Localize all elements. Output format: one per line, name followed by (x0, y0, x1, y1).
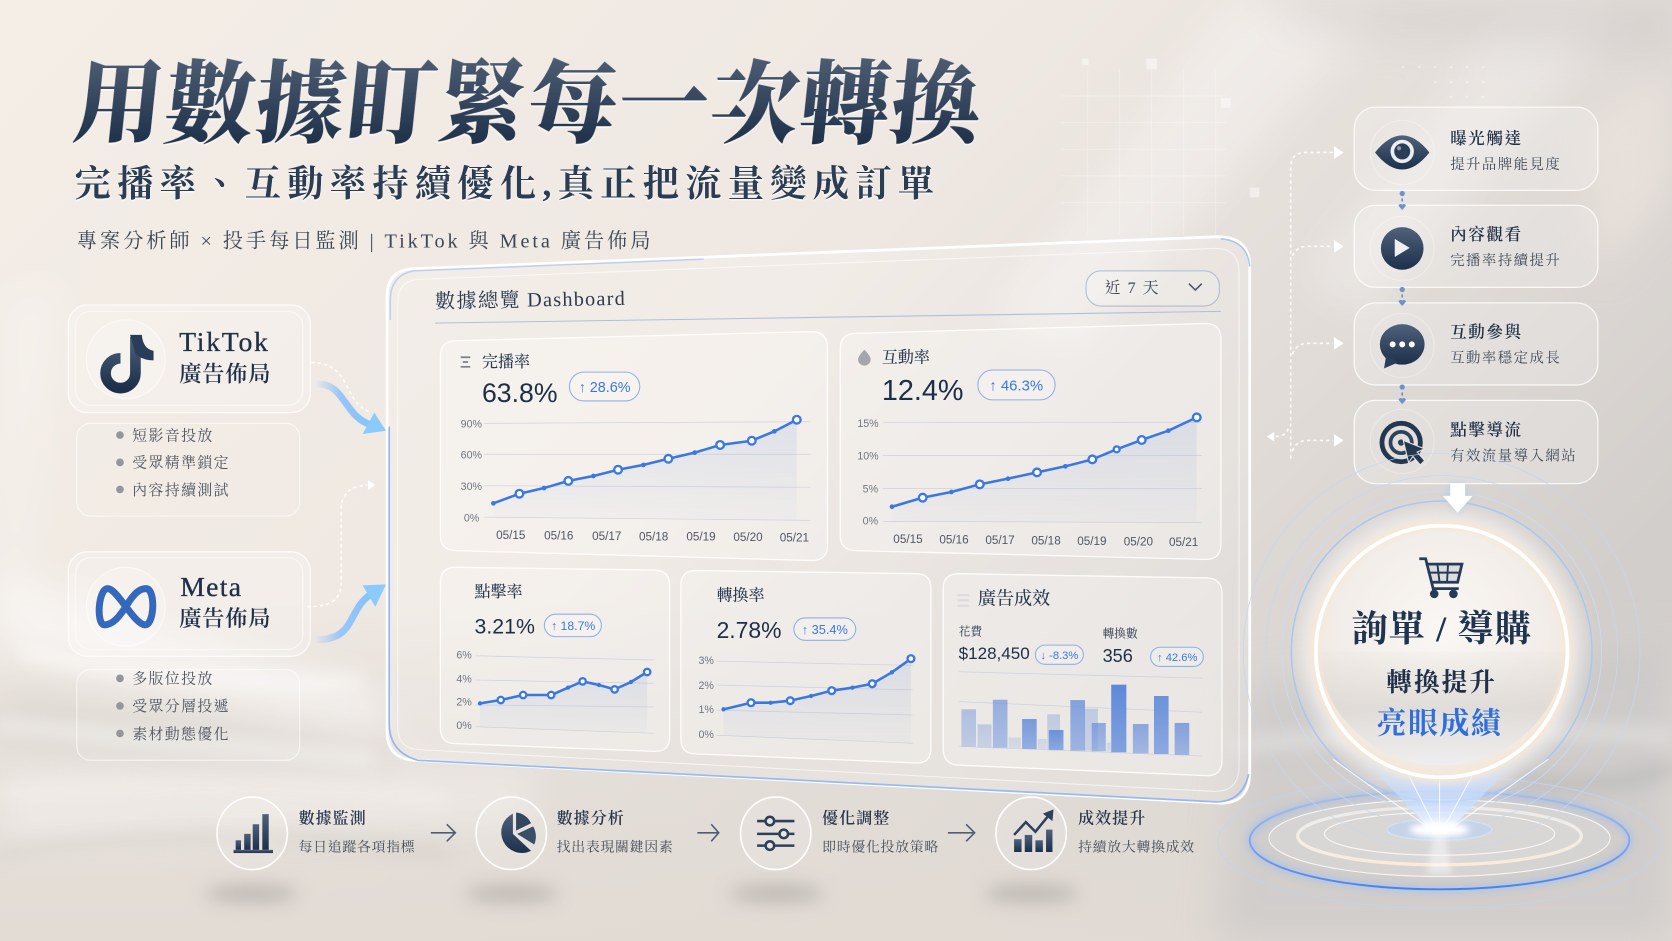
panel: engagement rate: 互動率 (882, 349, 930, 367)
icon: Meta infinity (86, 567, 165, 646)
step: optimization: 即時優化投放策略 (822, 838, 939, 854)
line chart: completion rate: 60% (461, 450, 483, 462)
panel: conversion rate: ↑ 35.4% (802, 622, 848, 637)
panel: completion rate: 完播率 (482, 353, 530, 371)
hub: light beam (1333, 752, 1548, 874)
arrow: into conversion orb (1443, 483, 1473, 513)
hub: conversion orb: 轉換提升 (1386, 667, 1497, 697)
panel: click rate (440, 567, 670, 751)
line chart: conversion rate: 3% (698, 655, 714, 667)
panel: view (1354, 205, 1598, 287)
line chart: engagement rate: 15% (857, 418, 879, 430)
panel: completion rate (440, 332, 827, 560)
panel: TikTok list: 受眾精準鎖定 (132, 454, 230, 472)
line chart: completion rate: 05/15 (496, 529, 526, 542)
panel: Meta list (77, 670, 300, 760)
panel: click traffic: 有效流量導入網站 (1450, 447, 1577, 465)
panel: click traffic (1354, 400, 1598, 484)
panel: completion rate: 63.8% (482, 378, 558, 408)
bar chart: ad performance (959, 672, 1202, 756)
line chart: engagement rate: 05/19 (1077, 535, 1107, 548)
line chart: click rate: 6% (456, 649, 472, 661)
title: 用數據盯緊每一次轉換 (69, 57, 990, 155)
flow connector: dotted branch lines (1267, 146, 1344, 459)
step: data analysis: 找出表現關鍵因素 (557, 838, 673, 854)
panel: Meta list: 多版位投放 (132, 670, 214, 688)
panel: ad performance: ↓ -8.3% (1040, 650, 1078, 662)
line chart: engagement rate: 10% (857, 451, 879, 463)
arrow: Meta to dashboard (307, 480, 386, 640)
line chart: conversion rate (698, 655, 914, 743)
arrow: step 2 to 3 (697, 824, 719, 841)
line chart: completion rate: 0% (464, 512, 480, 524)
line chart: completion rate: 05/16 (544, 530, 573, 543)
panel: view: 內容觀看 (1450, 224, 1523, 244)
panel: exposure: 曝光觸達 (1450, 128, 1523, 148)
hub: conversion orb: 詢單 / 導購 (1351, 608, 1532, 649)
icon: play (1381, 227, 1424, 270)
hub: conversion orb (1315, 525, 1569, 778)
step: optimization: 優化調整 (822, 809, 890, 828)
line chart: engagement rate: 05/15 (893, 533, 923, 546)
panel: click rate: ↑ 18.7% (551, 619, 595, 633)
step: performance lift: 持續放大轉換成效 (1078, 838, 1195, 854)
panel: ad performance: 356 (1103, 646, 1133, 666)
step: data monitoring: 數據監測 (299, 809, 367, 828)
line chart: engagement rate: 5% (863, 483, 879, 495)
line chart: completion rate: 05/17 (592, 530, 621, 543)
line chart: completion rate (461, 416, 810, 545)
arrow: step 3 to 4 (948, 824, 975, 841)
panel: exposure (1354, 107, 1598, 190)
line chart: conversion rate: 1% (698, 704, 714, 716)
panel: completion rate: ↑ 28.6% (579, 380, 631, 396)
icon: target cursor (1382, 423, 1425, 465)
panel: conversion rate: 轉換率 (717, 586, 765, 604)
line chart: completion rate: 90% (461, 419, 483, 431)
date filter: 近 7 天 (1105, 279, 1160, 297)
panel: engagement (1354, 303, 1598, 385)
line chart: conversion rate: 2% (698, 680, 714, 692)
line chart: engagement rate: 0% (863, 515, 879, 527)
panel: click traffic: 點擊導流 (1450, 420, 1523, 440)
panel: engagement: 互動參與 (1450, 322, 1523, 341)
panel: ad performance: $128,450 (959, 644, 1030, 663)
date filter (1086, 271, 1219, 306)
arrow: TikTok to dashboard (311, 363, 386, 434)
step: data monitoring (217, 797, 415, 870)
panel: engagement: 互動率穩定成長 (1450, 350, 1561, 367)
panel: engagement rate: 12.4% (882, 375, 963, 407)
panel: view: 完播率持續提升 (1450, 251, 1561, 269)
line chart: engagement rate: 05/21 (1169, 536, 1198, 549)
panel: conversion rate (681, 570, 931, 763)
panel: ad performance: 轉換數 (1103, 627, 1138, 641)
step: performance lift: 成效提升 (1078, 809, 1146, 828)
tagline: 專案分析師 × 投手每日監測 | TikTok 與 Meta 廣告佈局 (77, 229, 650, 252)
panel: exposure: 提升品牌能見度 (1450, 155, 1561, 173)
panel: ad performance: ↑ 42.6% (1157, 652, 1197, 664)
step: performance lift (996, 797, 1195, 870)
panel: TikTok list (77, 423, 300, 516)
subtitle: 完播率、互動率持續優化,真正把流量變成訂單 (75, 164, 934, 204)
panel: Meta list: 受眾分層投遞 (132, 697, 230, 715)
icon: eye (1375, 135, 1429, 170)
line chart: click rate (456, 649, 654, 733)
icon: bar chart (234, 814, 273, 853)
panel: TikTok card: TikTok (179, 326, 270, 357)
line chart: engagement rate: 05/18 (1031, 534, 1061, 547)
panel: TikTok card: 廣告佈局 (179, 361, 271, 387)
panel: dashboard (387, 237, 1250, 803)
line chart: completion rate: 05/19 (686, 531, 716, 544)
panel: ad performance: 花費 (959, 625, 983, 639)
hub: outer glow rings (1243, 453, 1640, 850)
icon: chat bubble (1380, 324, 1425, 368)
line chart: engagement rate: 05/16 (939, 533, 969, 546)
hub: conversion orb: 亮眼成績 (1377, 708, 1505, 741)
panel: click rate: 3.21% (475, 614, 535, 638)
line chart: completion rate: 05/21 (780, 532, 809, 545)
panel: TikTok card (68, 305, 310, 413)
panel: ad performance: 廣告成效 (978, 589, 1050, 609)
step: optimization (741, 797, 939, 870)
panel: engagement rate (840, 324, 1221, 559)
step: data analysis: 數據分析 (557, 809, 625, 828)
line chart: engagement rate: 05/20 (1124, 535, 1154, 548)
line chart: click rate: 2% (456, 696, 472, 708)
panel: TikTok list: 短影音投放 (132, 426, 214, 444)
panel: engagement rate: ↑ 46.3% (989, 377, 1043, 394)
step: data monitoring: 每日追蹤各項指標 (299, 838, 415, 854)
panel: Meta card (68, 552, 310, 656)
panel: Meta list: 素材動態優化 (132, 726, 230, 743)
panel: conversion rate: 2.78% (717, 617, 782, 643)
line chart: completion rate: 05/20 (733, 531, 763, 544)
icon: trend up (1014, 809, 1054, 852)
dashboard heading: 數據總覽 Dashboard (435, 287, 625, 313)
panel: click rate: 點擊率 (475, 583, 522, 601)
panel: ad performance (943, 574, 1222, 776)
line chart: click rate: 0% (456, 720, 472, 732)
icon: TikTok note (86, 320, 165, 399)
line chart: completion rate: 05/18 (639, 531, 669, 544)
panel: TikTok list: 內容持續測試 (132, 481, 230, 499)
arrow: step 1 to 2 (431, 824, 455, 841)
icon: shopping cart (1419, 559, 1462, 597)
panel: Meta card: Meta (180, 571, 242, 602)
line chart: engagement rate: 05/17 (985, 534, 1015, 547)
line chart: engagement rate (857, 414, 1202, 549)
line chart: click rate: 4% (456, 673, 472, 685)
line chart: completion rate: 30% (461, 481, 483, 493)
icon: sliders (757, 817, 794, 850)
hub: platform rings (1218, 776, 1661, 909)
step: data analysis (476, 797, 673, 870)
panel: Meta card: 廣告佈局 (179, 605, 271, 631)
line chart: conversion rate: 0% (698, 729, 714, 741)
icon: pie chart (501, 813, 536, 853)
flow connectors between steps (1398, 191, 1406, 404)
